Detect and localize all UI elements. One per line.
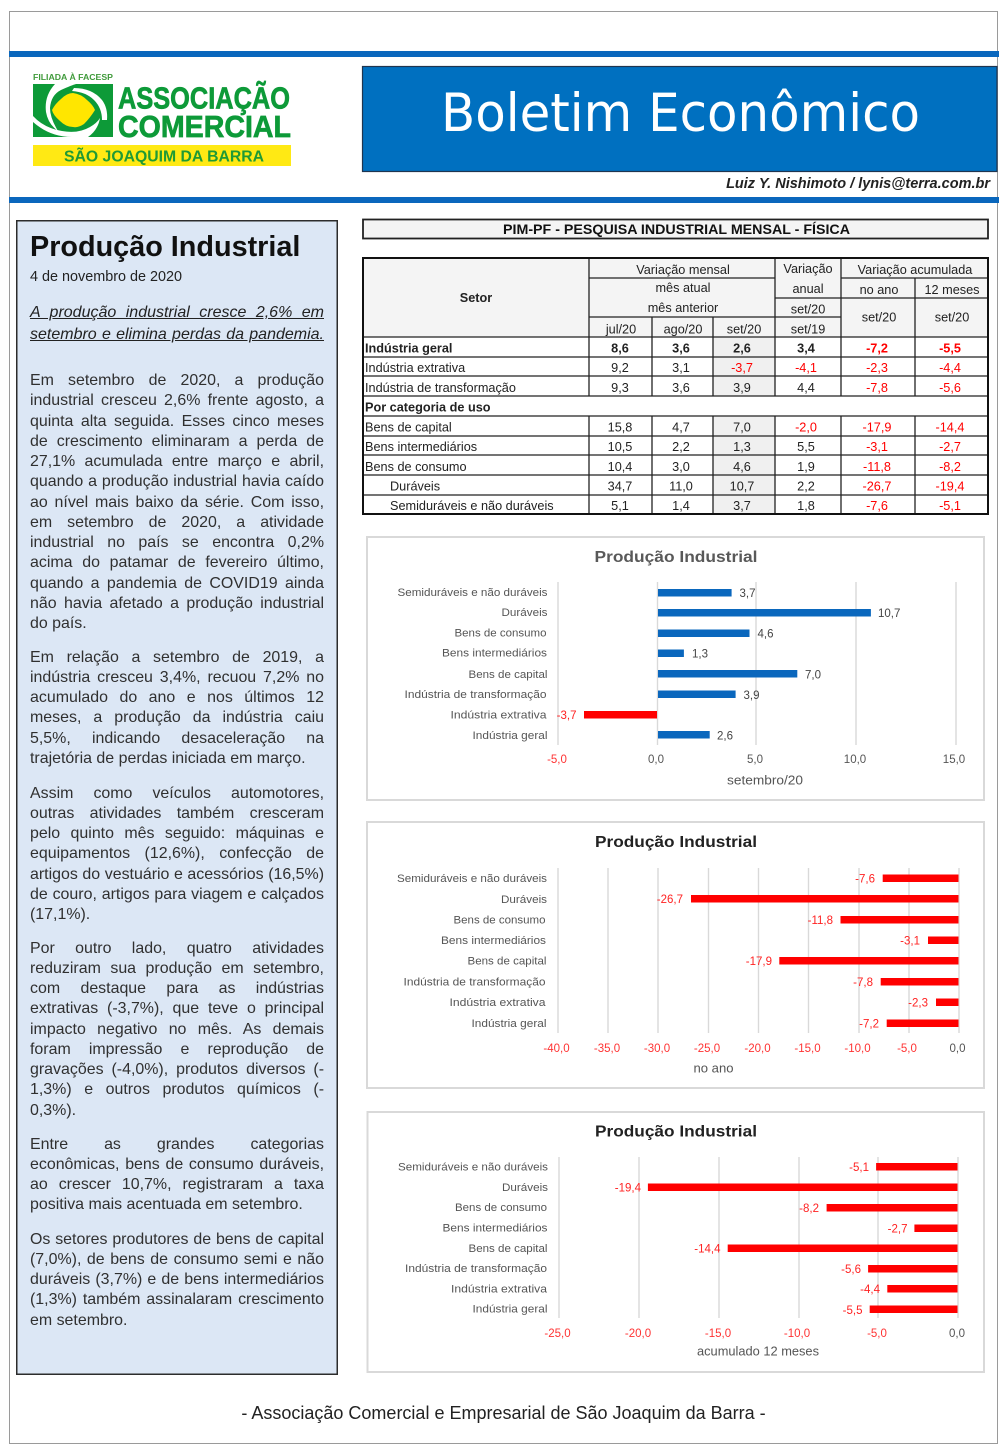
bar chart: setembro/20: 7,0 [805,670,821,682]
article paragraph 4 [30,940,324,1118]
bar chart: acumulado 12 meses: Produção Industrial [595,1124,757,1140]
bar chart: setembro/20: -5,0 [547,754,567,766]
article paragraph 3: artigos do vestuário e acessórios (16,5%) [30,866,324,882]
data table: set/20 [727,322,761,336]
bar chart: setembro/20: Bens intermediários [442,648,547,660]
data table: Bens de capital [365,420,452,434]
data table: -2,7 [939,440,961,454]
bar chart: setembro/20: setembro/20 [727,772,803,788]
bar chart: setembro/20: Duráveis [502,607,548,619]
bar chart: no ano: -7,6 [855,874,875,886]
bar chart: setembro/20: 2,6 [717,730,733,742]
bar chart: setembro/20: Indústria de transformação [404,689,546,701]
bar chart: no ano: -7,8 [853,977,873,989]
article paragraph 6: em setembro. [30,1312,127,1328]
bar chart: acumulado 12 meses: -5,5 [843,1305,862,1317]
article paragraph 2: trajetória de perdas iniciada em março. [30,750,306,767]
bar chart: setembro/20: Indústria geral [472,730,548,742]
logo: Associação Comercial: FILIADA À FACESP [33,72,113,82]
bar chart: setembro/20: 5,0 [747,754,763,766]
bar chart: acumulado 12 meses: -15,0 [705,1328,731,1340]
data table: no ano [860,283,898,297]
data table: 15,8 [608,420,632,434]
article paragraph 4: reduziram sua produção em setembro, [30,960,324,977]
data table: 34,7 [608,480,632,494]
data table: 4,6 [733,460,751,474]
bar chart: acumulado 12 meses: -10,0 [784,1328,810,1340]
data table: -19,4 [936,480,964,494]
article paragraph 1: acima do patamar de fevereiro último, [30,554,324,571]
data table: -5,1 [939,499,961,513]
data table: -3,1 [866,440,888,454]
data table: 12 meses [924,283,980,297]
bar chart: no ano: Bens de consumo [454,914,546,926]
data table: mês atual [655,281,711,295]
bar chart: acumulado 12 meses: -5,0 [867,1328,887,1340]
bar chart: acumulado 12 meses: -19,4 [615,1182,642,1194]
data table: Semiduráveis e não duráveis [390,499,554,513]
data table: anual [792,282,824,296]
data table: Variação mensal [636,263,730,277]
article paragraph 2: meses, a produção da indústria caiu [30,709,324,726]
data table: 2,2 [797,480,815,494]
data table: -7,8 [866,381,888,395]
author credit: Luiz Y. Nishimoto / lynis@terra.com.br [726,176,990,192]
bar chart: setembro/20 [367,537,984,800]
article paragraph 1: do país. [30,615,87,632]
data table: -7,6 [866,499,888,513]
logo: Associação Comercial: ASSOCIAÇÃO [118,80,290,116]
bar chart: no ano: Indústria extrativa [450,997,546,1009]
data table: 10,4 [608,460,632,474]
data table: -2,3 [866,361,888,375]
article date: 4 de novembro de 2020 [30,269,182,285]
article paragraph 6: (7,0%), de bens de consumo semi e não [30,1251,324,1268]
bar chart: setembro/20: 10,0 [844,754,866,766]
data table: 2,2 [672,440,690,454]
data table: Por categoria de uso [365,400,491,414]
bar chart: acumulado 12 meses: -20,0 [625,1328,651,1340]
bar chart: acumulado 12 meses: acumulado 12 meses [697,1344,819,1358]
article paragraph 2: 5,5%, indicando desaceleração na [30,730,324,746]
logo: Associação Comercial [33,72,291,166]
bar chart: acumulado 12 meses: -2,7 [888,1224,908,1236]
data table: 9,3 [611,381,629,395]
data table: 9,2 [611,361,629,375]
bar chart: setembro/20: -3,7 [557,710,576,722]
data table: Variação [783,262,833,276]
data table: 8,6 [611,342,629,356]
data table: 1,3 [733,440,751,454]
data table: 3,4 [797,342,815,356]
article paragraph 3: de couro, artigos para viagem e calçados [30,886,324,903]
article subtitle [29,304,324,343]
bar chart: acumulado 12 meses: -5,6 [841,1264,861,1276]
data table: -5,5 [939,342,961,356]
table title bar [363,220,988,238]
data table: Variação acumulada [858,263,973,277]
article paragraph 3: equipamentos (12,6%), confecção de [30,845,324,862]
data table: set/20 [791,302,825,316]
data table: Bens intermediários [365,440,477,454]
bar chart: acumulado 12 meses: -5,1 [849,1162,869,1174]
bar chart: no ano: -5,0 [897,1043,917,1055]
article paragraph 4: 1,3%) e outros produtos químicos (- [30,1081,324,1098]
bar chart: acumulado 12 meses: Indústria de transformação [405,1263,547,1275]
article paragraph 1: quando a produção industrial havia caído [30,473,324,490]
bar chart: no ano: Bens de capital [468,956,546,968]
data table: 3,6 [672,342,690,356]
bar chart: acumulado 12 meses: -14,4 [694,1244,721,1256]
article paragraph 1 [30,372,324,632]
bar chart: acumulado 12 meses: 0,0 [949,1328,965,1340]
article paragraph 5: ao crescer 10,7%, registraram a taxa [30,1176,324,1193]
bar chart: setembro/20: Bens de consumo [454,628,546,640]
data table: Bens de consumo [365,460,467,474]
article paragraph 5: Entre as grandes categorias [30,1136,324,1152]
data table: 4,7 [672,420,690,434]
bar chart: no ano: -17,9 [746,956,772,968]
article paragraph 4: com destaque para as indústrias [30,980,324,997]
article paragraph 6: (1,3%) também assinalaram crescimento [30,1291,324,1308]
bar chart: no ano: Duráveis [501,894,547,906]
data table: Setor [460,291,492,305]
bar chart: no ano: Indústria geral [472,1018,546,1030]
article paragraph 4: 0,3%). [30,1102,76,1118]
bar chart: no ano [367,822,984,1088]
data table: set/20 [935,310,969,324]
bar chart: no ano: -25,0 [694,1043,720,1055]
bar chart: no ano: -10,0 [844,1043,871,1055]
bar chart: no ano: -15,0 [794,1043,821,1055]
bar chart: acumulado 12 meses: Indústria extrativa [451,1284,548,1296]
data table: 7,0 [733,420,751,434]
data table: 1,8 [797,499,815,513]
data table: Indústria geral [365,342,452,356]
right column: table and charts [362,218,989,1373]
article paragraph 2: acumulado do ano e nos últimos 12 [30,689,324,706]
bar chart: acumulado 12 meses: -25,0 [544,1328,571,1340]
data table: -17,9 [863,420,891,434]
bar chart: setembro/20: Semiduráveis e não duráveis [398,587,548,599]
article paragraph 4: Por outro lado, quatro atividades [30,940,324,956]
article paragraph 5: positiva mais acentuada em setembro. [30,1196,303,1213]
data table: mês anterior [648,301,719,315]
article paragraph 3: pelo quinto mês seguido: máquinas e [30,825,324,842]
data table: -14,4 [936,420,964,434]
data table: 3,0 [672,460,690,474]
bar chart: setembro/20: 10,7 [878,608,900,620]
bar chart: setembro/20: Produção Industrial [594,549,758,566]
article paragraph 2 [30,648,324,767]
article paragraph 1: industrial no país se encontra 0,2% [30,534,324,551]
data table: 3,7 [733,499,751,513]
bar chart: setembro/20: 3,7 [740,588,756,600]
data table: ago/20 [664,322,702,336]
article paragraph 5 [30,1136,324,1213]
data table: Indústria de transformação [365,381,516,395]
banner: Boletim Econômico: Boletim Econômico [441,83,920,144]
data table: -11,8 [863,460,891,474]
bar chart: setembro/20: 1,3 [692,648,708,660]
data table: 1,9 [797,460,815,474]
bar chart: no ano: 0,0 [950,1043,966,1055]
bar chart: setembro/20: Indústria extrativa [450,710,547,722]
article paragraph 5: econômicas, bens de consumo duráveis, [30,1156,324,1173]
bar chart: acumulado 12 meses: Bens intermediários [442,1222,548,1234]
data table: -5,6 [939,381,961,395]
data table: set/19 [791,322,825,336]
article paragraph 1: ao nível mais baixo da série. Com isso, [30,494,324,510]
data table: 1,4 [672,499,690,513]
bar chart: no ano: no ano [694,1060,734,1076]
data table: -2,0 [795,420,817,434]
banner: Boletim Econômico [362,66,998,172]
data table: 3,1 [672,361,690,375]
bar chart: no ano: Produção Industrial [595,834,757,851]
panel: article [16,220,338,1375]
article paragraph 4: extrativas (-3,7%), que teve o principal [30,1000,324,1017]
bar chart: no ano: -35,0 [594,1043,620,1055]
data table: 2,6 [733,342,751,356]
bar chart: no ano: -2,3 [908,998,928,1010]
bar chart: no ano: Indústria de transformação [404,976,546,988]
footer: - Associação Comercial e Empresarial de São Joaquim da Barra - [241,1403,766,1423]
bar chart: setembro/20: Bens de capital [468,669,548,681]
data table: set/20 [862,310,896,324]
article paragraph 1: quinta alta seguida. Esses cinco meses [30,412,324,430]
logo: Associação Comercial: SÃO JOAQUIM DA BARRA [64,146,264,166]
article paragraph 3 [30,784,324,923]
article paragraph 3: (17,1%). [30,906,90,923]
data table: -4,4 [939,361,961,375]
article paragraph 1: em setembro de 2020, a atividade [30,514,324,531]
article paragraph 6: Os setores produtores de bens de capital [30,1230,324,1248]
data table: Indústria extrativa [365,361,466,375]
bar chart: no ano: -11,8 [808,915,833,927]
data table: Duráveis [390,480,440,494]
article subtitle: setembro e elimina perdas da pandemia. [30,326,324,343]
data table: -8,2 [939,460,961,474]
article paragraph 1: quando a pandemia de COVID19 ainda [30,574,324,592]
data table: -7,2 [866,342,888,356]
bar chart: setembro/20: 15,0 [943,754,965,766]
article paragraph 6 [30,1230,324,1328]
bar chart: no ano: -3,1 [900,936,920,948]
article heading: Produção Industrial [30,231,300,263]
bar chart: acumulado 12 meses: Indústria geral [472,1304,548,1316]
article paragraph 1: Em setembro de 2020, a produção [30,372,324,389]
data table: -26,7 [863,480,891,494]
article paragraph 4: gravações (-4,0%), produtos diversos (- [30,1061,324,1078]
article paragraph 4: foram impressão e reprodução de [30,1041,324,1058]
bar chart: acumulado 12 meses: Semiduráveis e não duráveis [398,1162,548,1174]
article paragraph 1: 27,1% acumulada entre março e abril, [30,453,324,470]
bar chart: no ano: Semiduráveis e não duráveis [397,873,547,885]
data table: 5,1 [611,499,629,513]
article paragraph 4: impacto negativo no mês. As demais [30,1020,324,1038]
article paragraph 3: outras atividades também cresceram [30,805,324,822]
data table: -4,1 [795,361,817,375]
data table: -3,7 [731,361,753,375]
bar chart: no ano: Bens intermediários [441,935,546,947]
article paragraph 1: não havia afetado a produção industrial [30,595,324,612]
article paragraph 3: Assim como veículos automotores, [30,784,324,802]
article paragraph 2: indústria cresceu 3,4%, recuou 7,2% no [30,669,324,686]
data table: 10,7 [730,480,754,494]
data table [363,258,988,514]
bar chart: acumulado 12 meses: -4,4 [860,1284,881,1296]
data table: 4,4 [797,381,815,395]
data table: 3,6 [672,381,690,395]
table title bar: PIM-PF - PESQUISA INDUSTRIAL MENSAL - FÍSICA [503,221,850,237]
bar chart: acumulado 12 meses: Bens de consumo [455,1202,547,1214]
bar chart: acumulado 12 meses: Bens de capital [468,1243,548,1255]
data table: 10,5 [608,440,632,454]
article paragraph 6: duráveis (3,7%) e de bens intermediários [30,1271,324,1288]
data table: 11,0 [669,480,693,494]
data table: jul/20 [605,322,636,336]
bar chart: no ano: -7,2 [859,1018,879,1030]
bar chart: setembro/20: 0,0 [648,754,664,766]
data table: 5,5 [797,440,815,454]
article paragraph 1: de crescimento eliminaram a perda de [30,433,324,450]
article paragraph 1: industrial cresceu 2,6% frente agosto, a [30,392,324,409]
bar chart: setembro/20: 3,9 [744,690,760,702]
data table: 3,9 [733,381,751,395]
article paragraph 2: Em relação a setembro de 2019, a [30,648,324,666]
bar chart: no ano: -30,0 [644,1043,670,1055]
bar chart: no ano: -20,0 [744,1043,771,1055]
article subtitle: A produção industrial cresce 2,6% em [30,304,324,321]
bar chart: setembro/20: 4,6 [758,628,774,640]
bar chart: acumulado 12 meses: -8,2 [799,1203,819,1215]
bar chart: acumulado 12 meses: Duráveis [502,1182,548,1194]
bar chart: no ano: -40,0 [543,1043,570,1055]
bar chart: acumulado 12 meses [368,1112,984,1372]
bar chart: no ano: -26,7 [657,894,683,906]
logo: Associação Comercial: COMERCIAL [118,109,291,144]
